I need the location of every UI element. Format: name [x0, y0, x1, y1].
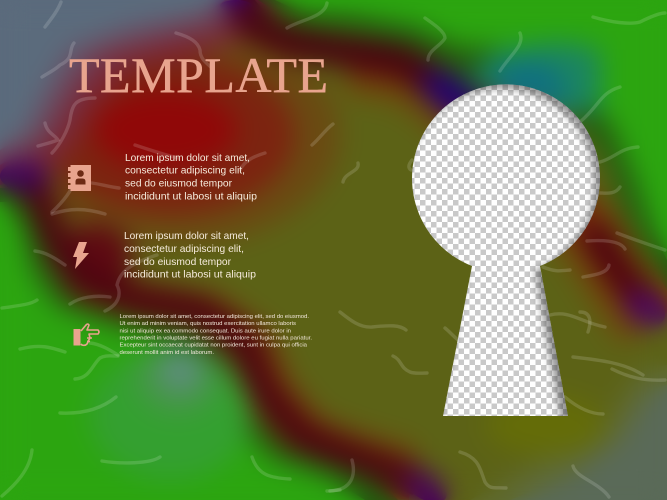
- text block 3: small paragraph: reprehenderit in voluptate velit esse cillum dolore eu fugiat nulla pariatur.: [120, 335, 312, 341]
- text block 3: small paragraph: nisi ut aliquip ex ea commodo consequat. Duis aute irure dolor in: [120, 328, 291, 334]
- text block 2: sed do eiusmod tempor: [124, 256, 231, 268]
- text block 2: Lorem ipsum dolor sit amet,: [124, 230, 249, 242]
- title: TEMPLATE: [69, 47, 328, 103]
- text block 1: sed do eiusmod tempor: [125, 178, 232, 190]
- text block 3: small paragraph: [120, 314, 312, 356]
- text block 3: small paragraph: Ut enim ad minim veniam, quis nostrud exercitation ullamco laboris: [120, 321, 296, 327]
- text block 1: Lorem ipsum dolor sit amet,: [125, 152, 250, 164]
- text block 1: [125, 152, 257, 202]
- text block 2: incididunt ut labosi ut aliquip: [124, 268, 256, 280]
- text block 2: [124, 230, 256, 280]
- keyhole with transparent checkerboard: [412, 84, 600, 416]
- icon: lightning bolt: [73, 242, 89, 269]
- text block 1: consectetur adipiscing elit,: [125, 165, 245, 177]
- text block 3: small paragraph: Lorem ipsum dolor sit amet, consectetur adipiscing elit, sed do eiusmod.: [120, 314, 309, 320]
- text block 2: consectetur adipiscing elit,: [124, 243, 244, 255]
- icon: contact book: [68, 165, 91, 191]
- icon: pointing hand: [74, 324, 99, 346]
- text block 3: small paragraph: Excepteur sint occaecat cupidatat non proident, sunt in culpa qui officia: [120, 343, 308, 349]
- text block 1: incididunt ut labosi ut aliquip: [125, 190, 257, 202]
- text block 3: small paragraph: deserunt mollit anim id est laborum.: [120, 350, 214, 356]
